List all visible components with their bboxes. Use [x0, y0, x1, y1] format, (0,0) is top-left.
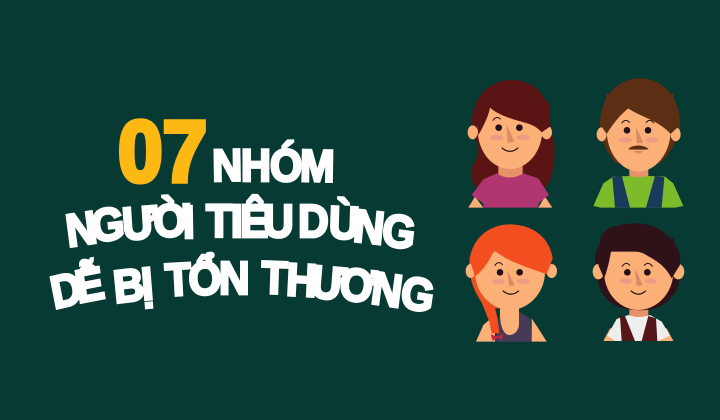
heading line 3: DỄ: [47, 257, 108, 319]
character: man with moustache and overalls: [593, 78, 683, 208]
braid bow: [491, 333, 503, 341]
heading line 3: TỔN: [164, 251, 250, 306]
heading line 3: BỊ: [111, 258, 155, 313]
heading line 2: [63, 194, 418, 260]
heading line 3: [47, 251, 438, 323]
character: woman with long dark red hair: [468, 80, 555, 208]
heading line 2: DÙNG: [298, 196, 418, 260]
heading line 3: THƯƠNG: [261, 252, 438, 323]
heading line 2: NGƯỜI: [63, 194, 195, 257]
heading line 2: TIÊU: [206, 195, 294, 247]
heading line 1: NHÓM: [212, 140, 335, 192]
character: boy with curly dark hair and vest: [593, 223, 684, 341]
number 07: 07: [118, 103, 207, 200]
character: woman with orange braid: [466, 224, 557, 342]
title: [47, 103, 438, 323]
